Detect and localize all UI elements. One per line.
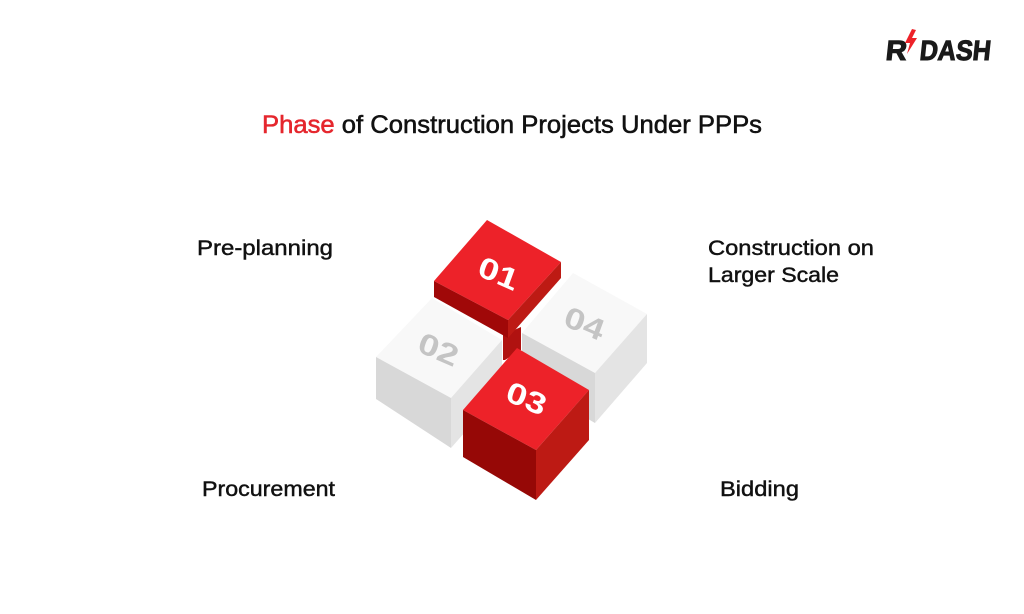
label: Construction on Larger Scale [708,236,874,287]
title: Phase of Construction Projects Under PPPs [262,111,762,139]
cube 04 [522,273,647,423]
label: Construction on Larger Scale: Larger Scale [708,263,839,287]
icon: lightning bolt [905,29,917,54]
cube 04: 04 [560,301,609,348]
logo: R [884,35,909,66]
label: Construction on Larger Scale: Construction on [708,236,874,260]
logo [884,29,993,66]
cube 01: 01 [474,251,523,298]
label: Bidding: Bidding [720,477,799,501]
label: Procurement: Procurement [202,477,335,501]
cube 02 [376,298,502,448]
label: Pre-planning: Pre-planning [197,236,333,260]
cube 03 [463,348,589,500]
cube 03: 03 [502,376,551,423]
cube 02: 02 [414,327,463,374]
cube 01 [434,220,561,360]
logo: DASH [918,35,993,66]
